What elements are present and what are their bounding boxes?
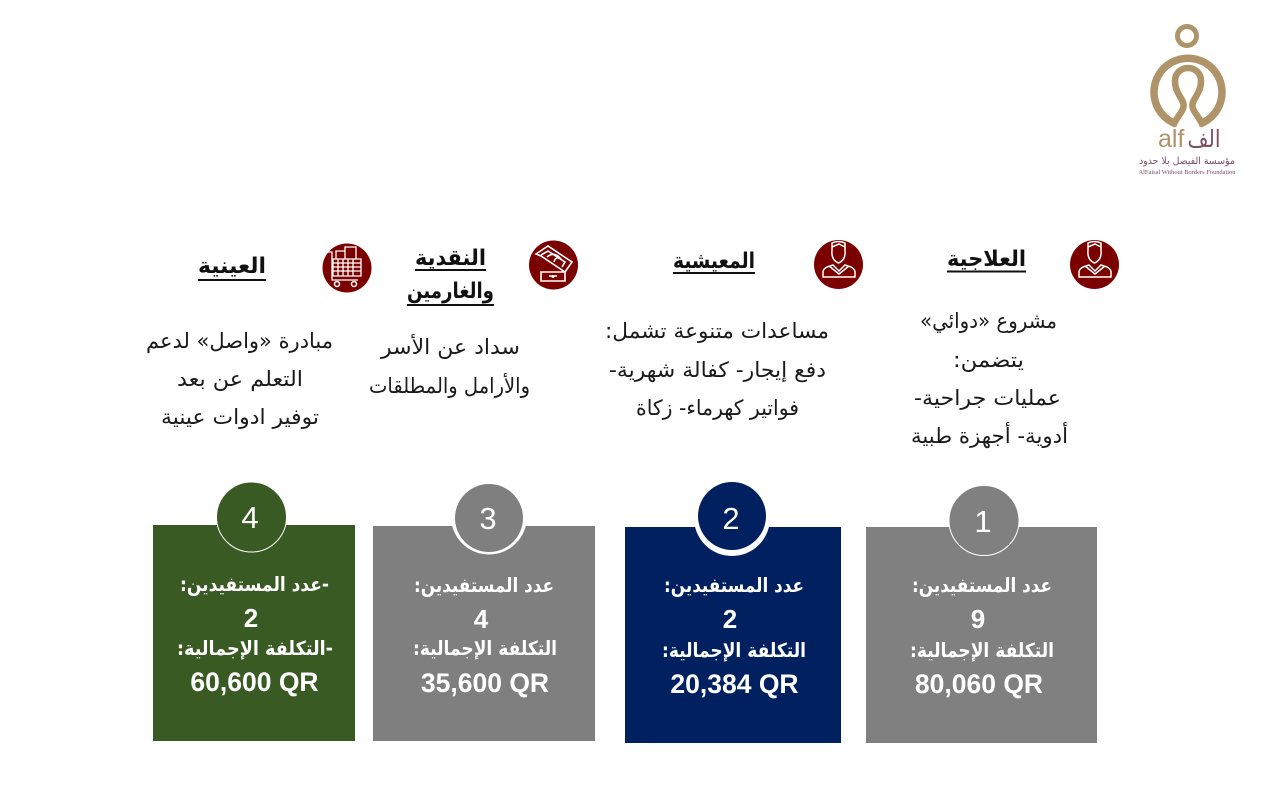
card 3: cash stats [373, 478, 595, 741]
card 1: medical stats: 1 [974, 504, 992, 539]
card 1: medical stats [866, 486, 1097, 743]
card 2: living stats [625, 480, 841, 743]
text: cash description [369, 334, 530, 398]
logo: Alfaisal Without Borders Foundation: AlFaisal Without Borders Foundation [1138, 170, 1236, 176]
card 1: medical stats: عدد المستفيدين: [912, 574, 1052, 597]
text: living description: مساعدات متنوعة تشمل: [605, 319, 829, 343]
logo: Alfaisal Without Borders Foundation: مؤسسة الفيصل بلا حدود [1139, 156, 1235, 167]
logo: Alfaisal Without Borders Foundation: alf [1158, 125, 1184, 153]
text: medical description: مشروع «دوائي» [920, 309, 1057, 333]
logo: Alfaisal Without Borders Foundation: الف [1188, 125, 1220, 153]
icon: medical person [1070, 240, 1119, 289]
icon: cash [529, 240, 578, 290]
card 3: cash stats: التكلفة الإجمالية: [413, 637, 557, 660]
text: living description [605, 319, 829, 420]
heading: medical: العلاجية [947, 247, 1026, 272]
heading: cash and debtors: والغارمين [407, 279, 494, 304]
text: medical description: عمليات جراحية- [914, 386, 1061, 410]
text: cash description: والأرامل والمطلقات [369, 373, 530, 398]
card 2: living stats: 2 [722, 501, 740, 536]
card 2: living stats: عدد المستفيدين: [664, 574, 804, 597]
text: medical description [911, 309, 1068, 448]
icon: shopping cart [322, 244, 372, 292]
text: in-kind description [146, 329, 333, 429]
text: living description: فواتير كهرماء- زكاة [636, 396, 799, 420]
text: in-kind description: التعلم عن بعد [177, 367, 303, 392]
card 3: cash stats: 3 [479, 501, 497, 536]
card 3: cash stats: عدد المستفيدين: [414, 574, 554, 597]
card 4: in-kind stats: -عدد المستفيدين: [180, 573, 329, 596]
card 2: living stats: 20,384 QR [670, 669, 799, 699]
card 4: in-kind stats: -التكلفة الإجمالية: [177, 637, 333, 660]
card 2: living stats: التكلفة الإجمالية: [662, 639, 806, 662]
card 4: in-kind stats [153, 482, 355, 741]
card 1: medical stats: التكلفة الإجمالية: [910, 639, 1054, 662]
card 3: cash stats: 35,600 QR [421, 668, 549, 698]
text: cash description: سداد عن الأسر [380, 334, 520, 359]
text: medical description: أدوية- أجهزة طبية [911, 422, 1068, 448]
card 3: cash stats: 4 [474, 604, 489, 634]
card 4: in-kind stats: 2 [244, 603, 258, 633]
text: in-kind description: مبادرة «واصل» لدعم [146, 329, 333, 354]
card 2: living stats: 2 [723, 604, 737, 634]
text: living description: دفع إيجار- كفالة شهرية- [609, 358, 826, 383]
text: medical description: يتضمن: [953, 348, 1024, 372]
logo: Alfaisal Without Borders Foundation [1138, 26, 1236, 176]
heading: cash and debtors: النقدية [415, 246, 486, 271]
icon: living person [814, 240, 863, 289]
heading: cash and debtors [407, 246, 494, 306]
card 1: medical stats: 80,060 QR [915, 669, 1043, 699]
text: in-kind description: توفير ادوات عينية [161, 405, 319, 429]
card 1: medical stats: 9 [971, 604, 985, 634]
card 4: in-kind stats: 60,600 QR [190, 667, 319, 697]
heading: living: المعيشية [673, 249, 755, 274]
heading: in-kind: العينية [198, 254, 266, 279]
card 4: in-kind stats: 4 [241, 500, 259, 535]
